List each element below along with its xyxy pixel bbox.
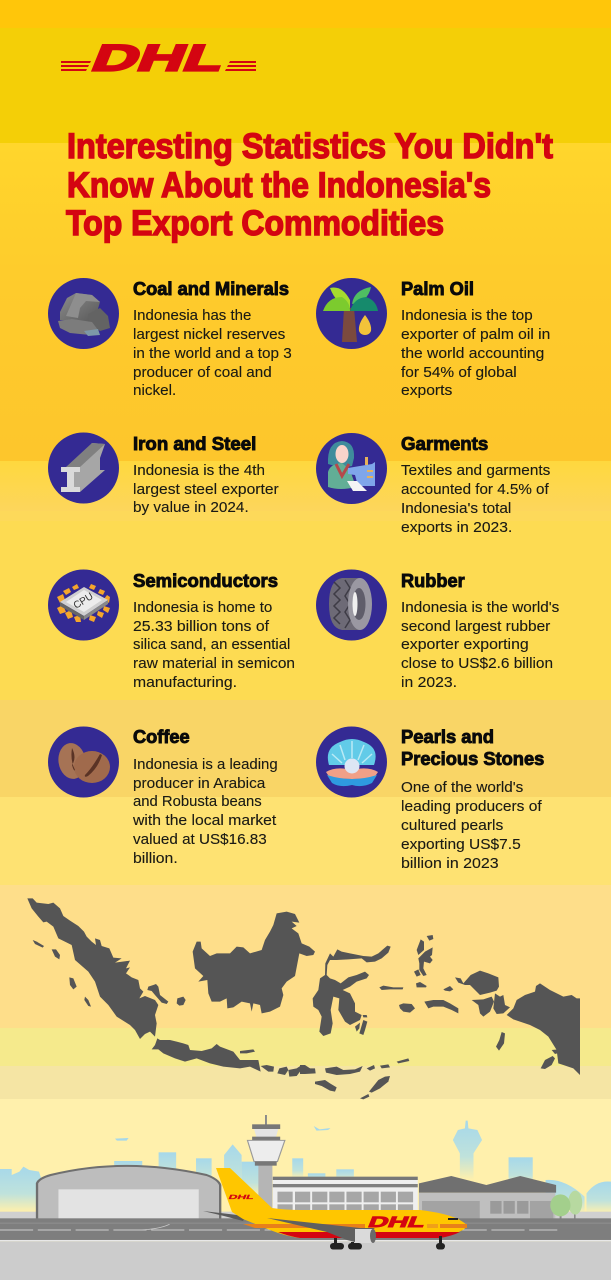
heading: Coal and Minerals <box>133 278 289 299</box>
panel: iron and steel <box>48 432 279 516</box>
text block: largest steel exporter <box>133 481 279 498</box>
wing <box>267 1218 375 1242</box>
text block: largest nickel reserves <box>133 326 285 343</box>
text block: in 2023. <box>401 674 457 691</box>
heading: Iron and Steel <box>133 433 256 454</box>
trees <box>550 1191 582 1220</box>
panel: coal and minerals <box>48 278 292 399</box>
title <box>66 127 553 243</box>
text block: raw material in semicon <box>133 655 295 672</box>
heading: Rubber <box>401 570 465 591</box>
text block: Indonesia is a leading <box>133 756 278 773</box>
text block <box>133 599 295 691</box>
tail logo: DHL <box>227 1194 255 1201</box>
sulawesi <box>313 946 391 1036</box>
text block: Indonesia is the 4th <box>133 462 265 479</box>
panel: garments <box>316 433 550 536</box>
skyline <box>0 1121 611 1213</box>
cheatline <box>243 1224 467 1228</box>
panel: palm oil <box>316 278 550 399</box>
icon: palm tree and oil drop <box>316 278 387 349</box>
title: Interesting Statistics You Didn't <box>67 127 553 166</box>
heading: Coffee <box>133 726 190 747</box>
text block: producer of coal and <box>133 364 272 381</box>
hangar <box>37 1166 220 1220</box>
text block <box>133 462 279 516</box>
text block <box>401 599 559 691</box>
text block: for 54% of global <box>401 364 517 381</box>
text block: cultured pearls <box>401 817 503 834</box>
text block: exports <box>401 382 452 399</box>
text block: exporter of palm oil in <box>401 326 550 343</box>
panel: coffee <box>48 726 278 867</box>
text block <box>133 307 292 399</box>
text block <box>401 307 550 399</box>
title: Know About the Indonesia's <box>67 166 491 205</box>
airport scene <box>0 1115 611 1280</box>
text block: second largest rubber <box>401 618 550 635</box>
heading: Palm Oil <box>401 278 474 299</box>
text block: exporting US$7.5 <box>401 836 521 853</box>
icon: steel beam <box>48 432 119 504</box>
runway <box>0 1218 611 1280</box>
text block: nickel. <box>133 382 176 399</box>
text block: silica sand, an essential <box>133 636 290 653</box>
text block: in the world and a top 3 <box>133 345 292 362</box>
text block: exporter exporting <box>401 636 529 653</box>
distant plane right <box>314 1126 330 1131</box>
heading <box>401 726 544 769</box>
icon: seamstress at sewing machine <box>316 433 387 504</box>
text block: with the local market <box>132 812 277 829</box>
western and lesser sunda islands <box>33 940 310 1077</box>
cargo plane <box>203 1168 467 1250</box>
borneo <box>193 912 315 1013</box>
text block <box>132 756 278 867</box>
title: Top Export Commodities <box>66 204 444 243</box>
text block: billion. <box>133 850 178 867</box>
java <box>152 1038 261 1072</box>
icon: cpu chip: CPU <box>72 591 95 612</box>
text block: leading producers of <box>401 798 543 815</box>
DHL logo: DHL <box>86 38 232 79</box>
warehouse <box>419 1176 556 1221</box>
eastern islands <box>300 935 560 1099</box>
distant plane left <box>115 1138 129 1141</box>
papua <box>507 983 580 1075</box>
text block: manufacturing. <box>133 674 237 691</box>
text block: accounted for 4.5% of <box>401 481 550 498</box>
text block: by value in 2024. <box>133 499 249 516</box>
text block: Indonesia is home to <box>133 599 272 616</box>
heading: Semiconductors <box>133 570 278 591</box>
terminal building <box>273 1177 418 1221</box>
engine <box>355 1229 376 1243</box>
panel: pearls and precious stones <box>316 726 544 872</box>
text block: exports in 2023. <box>401 519 512 536</box>
icon: coffee beans <box>48 726 119 798</box>
text block: 25.33 billion tons of <box>133 618 270 635</box>
icon: tyre <box>316 570 387 640</box>
panel: rubber <box>316 570 559 691</box>
text block: Textiles and garments <box>401 462 550 479</box>
icon: coal rock <box>48 278 119 349</box>
map of Indonesia <box>27 898 580 1099</box>
text block: producer in Arabica <box>133 775 266 792</box>
landing gear <box>330 1236 445 1250</box>
text block: valued at US$16.83 <box>133 831 267 848</box>
fuselage logo: DHL <box>365 1215 429 1231</box>
sumatra <box>27 898 158 1039</box>
text block: the world accounting <box>401 345 544 362</box>
text block: Indonesia is the world's <box>401 599 559 616</box>
text block: close to US$2.6 billion <box>401 655 553 672</box>
text block: billion in 2023 <box>401 855 499 872</box>
text block: One of the world's <box>401 779 523 796</box>
heading: Garments <box>401 433 488 454</box>
tail stabilizer <box>203 1211 246 1221</box>
belly <box>278 1232 460 1238</box>
panel: semiconductors <box>48 570 295 691</box>
cockpit <box>448 1218 458 1220</box>
text block: Indonesia has the <box>133 307 251 324</box>
control tower <box>247 1115 285 1212</box>
heading: Precious Stones <box>401 748 544 769</box>
heading: Pearls and <box>401 726 494 747</box>
text block: Indonesia is the top <box>401 307 533 324</box>
icon: pearl in shell <box>316 726 387 798</box>
icon: cpu chip <box>48 570 119 640</box>
text block: and Robusta beans <box>133 793 262 810</box>
fuselage <box>216 1168 467 1238</box>
text block <box>401 779 543 872</box>
text block: Indonesia's total <box>401 500 511 517</box>
text block <box>401 462 550 536</box>
